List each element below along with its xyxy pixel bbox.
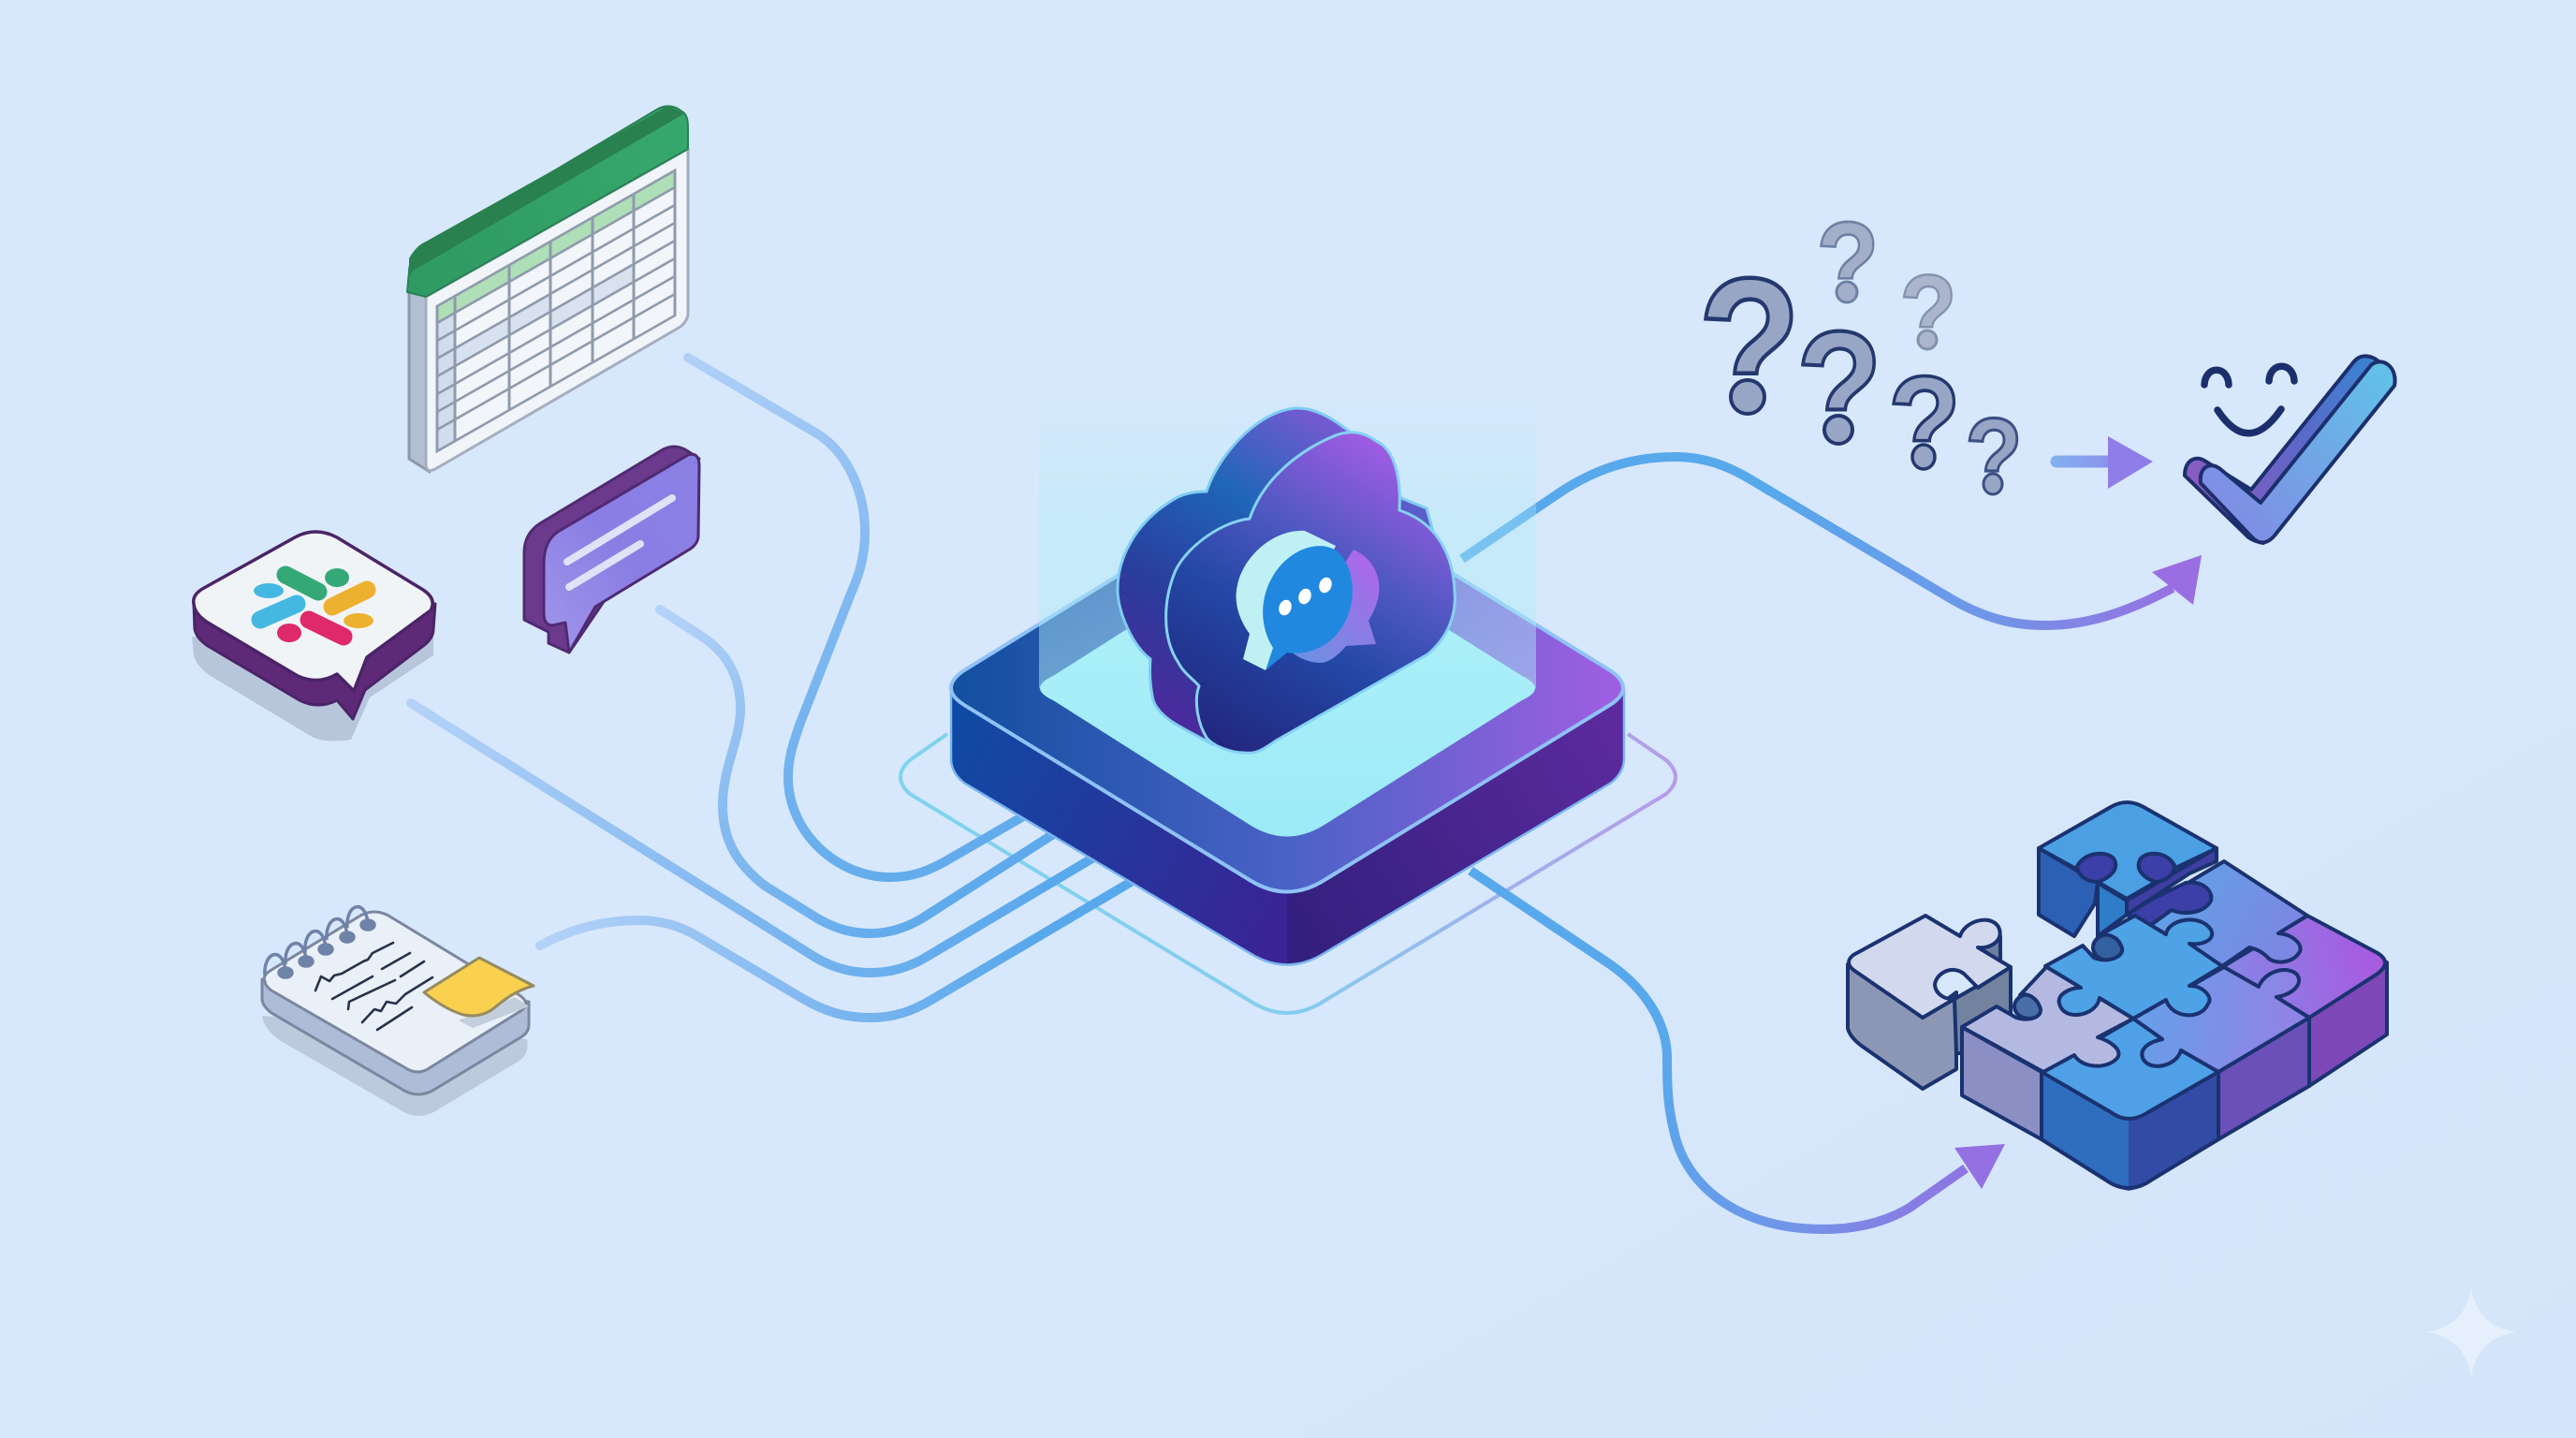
platform right side xyxy=(1287,688,1624,965)
puzzle piece: left xyxy=(1962,966,2133,1072)
icon: question marks: ? xyxy=(1796,299,1882,477)
connector: chat bubble to platform xyxy=(660,609,1058,933)
check front xyxy=(2201,361,2395,543)
sticky note xyxy=(424,958,534,1016)
puzzle notch: lower left xyxy=(2014,994,2044,1019)
watermark sparkle xyxy=(2426,1287,2516,1377)
icon: question marks: ? xyxy=(1899,253,1957,372)
sheet header band xyxy=(407,106,688,297)
notepad page xyxy=(264,912,526,1072)
icon: slack message bubble xyxy=(192,532,435,741)
notepad scribbles xyxy=(315,943,432,1030)
bubble side xyxy=(524,447,699,653)
icon: question marks xyxy=(1704,221,2018,496)
glass column xyxy=(1039,403,1536,824)
icon: purple chat bubble xyxy=(524,447,699,653)
raised puzzle piece xyxy=(2039,802,2217,936)
platform left side xyxy=(951,688,1287,965)
central platform xyxy=(951,403,1624,965)
icon: spreadsheet xyxy=(407,106,688,472)
connector: notepad to platform xyxy=(540,878,1137,1018)
smile xyxy=(2204,366,2294,433)
puzzle piece: lower right xyxy=(2133,967,2309,1072)
connector: spreadsheet to platform xyxy=(688,358,1030,877)
bubble text lines xyxy=(567,498,672,587)
icon: question marks: ? xyxy=(1965,395,2023,517)
sheet side xyxy=(409,292,430,472)
icon: smiling check mark xyxy=(2185,356,2395,543)
arrow: platform to puzzle xyxy=(1471,871,2005,1229)
icon: question marks: ? xyxy=(1888,350,1961,496)
slack logo xyxy=(254,568,373,642)
cloud back layer xyxy=(1118,408,1442,744)
loose puzzle piece xyxy=(1848,916,2011,1089)
puzzle side faces xyxy=(1962,962,2387,1191)
sheet front xyxy=(426,149,688,471)
glowing inner surface xyxy=(1040,539,1535,837)
connector: slack to platform xyxy=(411,703,1100,973)
arrow: platform to resolved questions xyxy=(1462,457,2202,625)
notepad shadow xyxy=(262,1016,528,1116)
speech bubbles xyxy=(1237,531,1379,670)
notepad side xyxy=(262,979,529,1094)
sheet grid xyxy=(437,170,675,451)
cloud front face xyxy=(1166,433,1455,753)
puzzle piece: right xyxy=(2222,916,2385,1018)
icon: question marks: ? xyxy=(1698,239,1801,456)
bubble shadow xyxy=(192,627,433,741)
check back layer xyxy=(2185,356,2382,543)
icon: question marks: ? xyxy=(1816,198,1880,327)
icon: notepad xyxy=(262,907,534,1116)
puzzle piece: bottom xyxy=(2042,1019,2218,1119)
puzzle piece: top right xyxy=(2133,861,2307,966)
bubble front xyxy=(544,454,699,653)
platform silhouette xyxy=(951,688,1624,964)
bubble top xyxy=(194,532,432,691)
platform top face xyxy=(951,483,1623,891)
bubble side xyxy=(194,604,435,719)
icon: puzzle block xyxy=(1848,802,2387,1191)
notepad rings xyxy=(265,907,374,977)
puzzle notch: centre xyxy=(2093,934,2125,961)
sticky note shadow xyxy=(459,997,529,1028)
puzzle piece: centre xyxy=(2045,916,2222,1019)
cloud icon xyxy=(1118,408,1455,753)
platform base outline xyxy=(900,734,1676,1013)
arrow: questions to check mark xyxy=(2056,436,2153,489)
